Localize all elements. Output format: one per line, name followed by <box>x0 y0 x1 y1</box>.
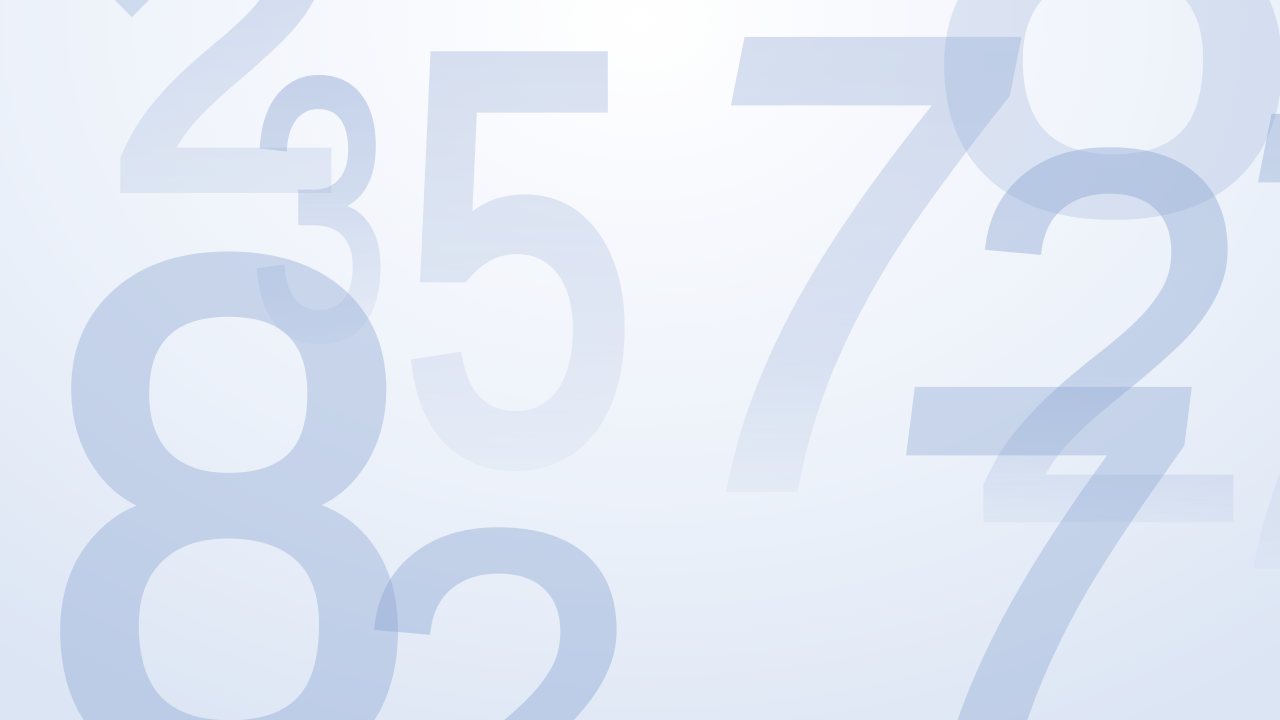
numeral: 3: 3 <box>250 2 389 416</box>
numeral: 2 right: 2 <box>961 42 1256 629</box>
